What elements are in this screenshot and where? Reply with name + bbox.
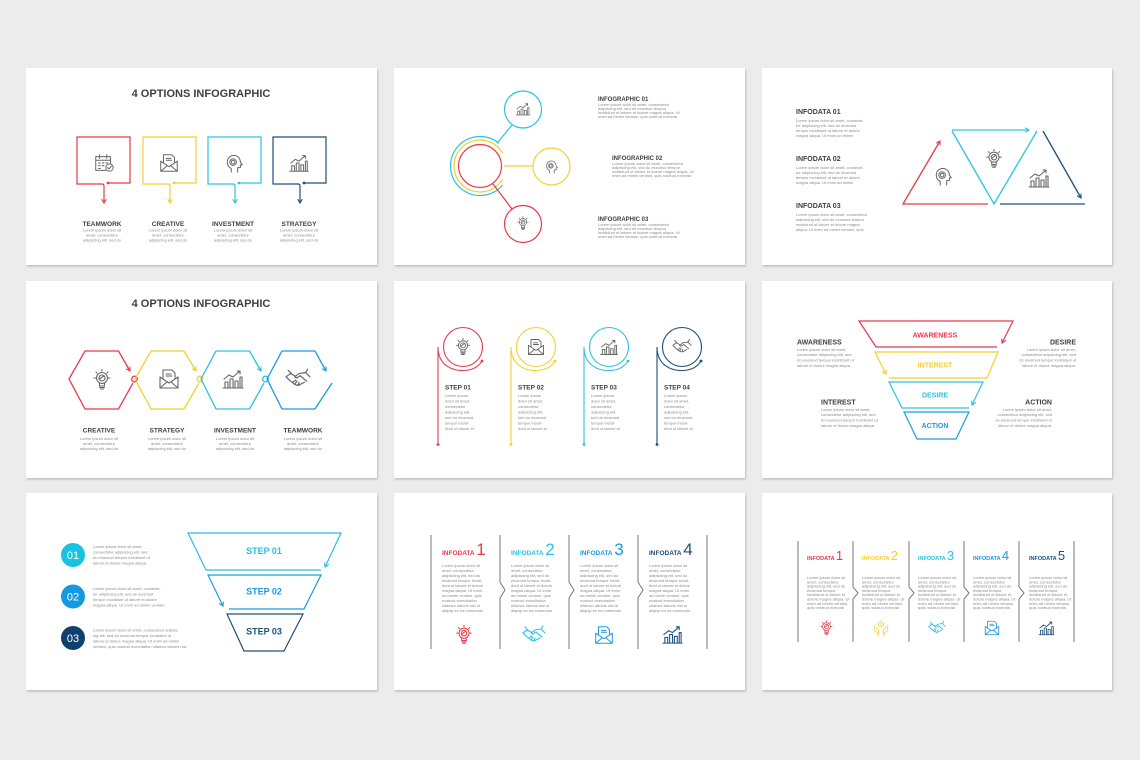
column 1: nostrud exercitation <box>442 598 477 603</box>
text: infodata 03: incididunt ut labore et dolore magna <box>796 222 860 227</box>
triangle red <box>903 141 988 204</box>
text: infographic 01: enim ad minim veniam, quis nostrud exercita <box>598 114 678 119</box>
step 04: dolor sit amet, <box>664 398 689 404</box>
labels: Lorem ipsum dolor sit <box>284 436 323 441</box>
column 3: dunt ut labore et dolore <box>580 583 622 588</box>
text: action: Lorem ipsum dolor sit amet, <box>1003 407 1052 412</box>
option: strategy <box>273 137 326 242</box>
text: desire: do eiusmod tempor incididunt ut <box>1019 358 1077 362</box>
node 3 bulb <box>504 206 542 242</box>
column 4: quis nostrud exercita <box>973 605 1011 610</box>
panel: slide 9 infodata 1-5 columns <box>762 493 1112 690</box>
column dividers <box>798 541 1074 642</box>
option: teamwork: Lorem ipsum dolor sit <box>83 228 122 232</box>
option: teamwork: amet, consectetur <box>86 232 119 238</box>
column 5: Lorem ipsum dolor sit <box>1029 575 1068 580</box>
step 01: Lorem ipsum <box>445 393 469 398</box>
funnel: desire: DESIRE <box>922 392 948 400</box>
column 4: adipiscing elit, sed do <box>973 584 1012 589</box>
title: 4 OPTIONS INFOGRAPHIC <box>132 88 270 100</box>
funnel: interest <box>875 352 998 378</box>
text: infodata 01: tempor incididunt ut labore et dolore <box>796 128 861 133</box>
option: creative: CREATIVE <box>152 221 185 228</box>
text: infographic 03 <box>598 217 680 239</box>
text: action: do eiusmod tempor incididunt ut <box>995 418 1053 422</box>
text: infographic 01 <box>598 97 680 119</box>
text: desire <box>1019 340 1077 368</box>
funnel step 01: STEP 01 <box>246 546 282 556</box>
column 1: Lorem ipsum dolor sit <box>442 563 481 568</box>
column 1: amet, consectetur <box>807 579 839 584</box>
column 3: incididunt ut labore et <box>918 592 957 597</box>
column 1: dolore magna aliqua. Ut <box>807 596 850 602</box>
node 2 head <box>533 148 570 185</box>
option: investment: INVESTMENT <box>212 221 254 228</box>
step 03: Lorem ipsum <box>591 393 615 398</box>
labels: CREATIVE <box>83 428 116 434</box>
column 1: Lorem ipsum dolor sit <box>807 575 846 580</box>
panel: slide 1 four options squares <box>26 68 377 265</box>
column 1: ullamco laboris nisi ut <box>442 603 481 608</box>
column 1: ad minim veniam, quis <box>442 593 482 598</box>
hexagon: creative <box>69 351 137 409</box>
text: infodata 01 <box>796 109 864 138</box>
column 2: magna aliqua. Ut enim <box>511 588 552 593</box>
title: 4 OPTIONS INFOGRAPHIC <box>132 298 270 310</box>
step 03: tempor incidi- <box>591 420 616 426</box>
step 03: dunt ut labore et <box>591 426 621 431</box>
column 2: INFODATA 2 <box>511 540 555 559</box>
labels: amet, consectetur <box>287 441 320 446</box>
column 1: adipiscing elit, sed do <box>807 584 846 589</box>
funnel: action <box>904 412 969 439</box>
step 02: sed do eiusmod <box>518 415 546 420</box>
step 04: Lorem ipsum <box>664 393 688 398</box>
step 01: dolor sit amet, <box>445 398 470 404</box>
step 02: Lorem ipsum <box>518 393 542 398</box>
badge 01: do eiusmod tempor incididunt ut <box>93 555 151 560</box>
text: interest: do eiusmod tempor incididunt ut <box>821 418 879 422</box>
step 02: STEP 02 <box>518 384 544 392</box>
column 4: dolore magna aliqua. Ut <box>973 596 1016 602</box>
text: desire: consectetur adipiscing elit, sed <box>1022 352 1076 357</box>
funnel: desire <box>889 382 983 408</box>
column 2: quis nostrud exercita <box>862 605 900 610</box>
step 04: tempor incidi- <box>664 420 689 426</box>
text: infographic 01: adipiscing elit, sed do eiusmod tempor <box>598 106 667 111</box>
column 1: quis nostrud exercita <box>807 605 845 610</box>
badge 01: labore et dolore magna aliqua. <box>93 560 147 566</box>
text: infographic 03: Lorem ipsum dolor sit amet, consectetur <box>598 222 670 227</box>
option: investment: amet, consectetur <box>217 232 250 238</box>
triangle dark blue <box>1000 131 1085 204</box>
column 4: magna aliqua. Ut enim <box>649 588 690 593</box>
column 4: amet, consectetur <box>973 579 1005 584</box>
step 03: sed do eiusmod <box>591 415 619 420</box>
step 02 <box>510 328 556 446</box>
step 04: consectetur <box>664 404 685 409</box>
panel: slide 7 numbered steps funnel <box>26 493 377 690</box>
labels: adipiscing elit, sed do <box>284 446 323 451</box>
text: infographic 02: Lorem ipsum dolor sit amet, consectetur <box>612 161 684 166</box>
column 4: adipiscing elit, sed do <box>649 573 688 578</box>
column 1: INFODATA 1 <box>442 540 486 559</box>
step 01: adipiscing elit, <box>445 410 470 414</box>
step 04: adipiscing elit, <box>664 410 689 414</box>
column 2: adipiscing elit, sed do <box>862 584 901 589</box>
column 4: Lorem ipsum dolor sit <box>649 563 688 568</box>
column 3: enim ad minim veniam, <box>918 601 959 606</box>
text: infodata 01: magna aliqua. Ut enim ad minim <box>796 133 854 138</box>
labels: Lorem ipsum dolor sit <box>148 436 187 441</box>
column 3: ullamco laboris nisi ut <box>580 603 619 608</box>
text: awareness: consectetur adipiscing elit, sed <box>797 352 851 357</box>
hexagon: strategy <box>135 351 203 409</box>
text: infographic 02: adipiscing elit, sed do eiusmod tempor <box>612 165 681 170</box>
step 03 <box>583 328 629 446</box>
step 03: STEP 03 <box>591 384 617 392</box>
column dividers <box>431 535 707 649</box>
text: awareness <box>797 340 855 368</box>
step 04: dunt ut labore et <box>664 426 694 431</box>
column 2: incididunt ut labore et <box>862 592 901 597</box>
column 2: amet, consectetur <box>511 568 543 573</box>
labels: amet, consectetur <box>219 441 252 446</box>
column 4 <box>973 548 1016 635</box>
text: infographic 03: incididunt ut labore et dolore magna aliqua. Ut <box>598 230 680 235</box>
column 3: Lorem ipsum dolor sit <box>918 575 957 580</box>
labels <box>80 428 323 451</box>
option: strategy: STRATEGY <box>282 221 317 228</box>
column 5: amet, consectetur <box>1029 579 1061 584</box>
badge 02: Lorem ipsum dolor sit amet, consecte- <box>93 586 161 591</box>
step 03: consectetur <box>591 404 612 409</box>
step 02: tempor incidi- <box>518 420 543 426</box>
text: infodata 01: INFODATA 01 <box>796 109 841 116</box>
column 4: dunt ut labore et dolore <box>649 583 691 588</box>
text: interest: Lorem ipsum dolor sit amet, <box>821 407 870 412</box>
column 1: enim ad minim veniam, <box>807 601 848 606</box>
column 4: amet, consectetur <box>649 568 681 573</box>
step 02: dunt ut labore et <box>518 426 548 431</box>
hub rings <box>451 125 533 209</box>
text: infographic 02: enim ad minim veniam, quis nostrud exercita <box>612 173 692 178</box>
badge 02: magna aliqua. Ut enim ad minim veniam, <box>93 602 165 608</box>
step 02: adipiscing elit, <box>518 410 543 414</box>
column 4: eiusmod tempor <box>973 588 1002 593</box>
panel: slide 8 infodata 1-4 columns <box>394 493 745 690</box>
column 3: aliquip ex ea commodo <box>580 608 622 613</box>
option: creative: adipiscing elit, sed do <box>149 238 188 242</box>
labels: adipiscing elit, sed do <box>80 446 119 451</box>
badge 03: Lorem ipsum dolor sit amet, consectetur adipisc <box>93 628 178 632</box>
text: infographic 03: enim ad minim veniam, quis nostrud exercita <box>598 234 678 239</box>
text: infodata 03: Lorem ipsum dolor sit amet, consectetur <box>796 212 868 217</box>
column 4: enim ad minim veniam, <box>973 601 1014 606</box>
badge 01: Lorem ipsum dolor sit amet, <box>93 544 142 549</box>
column 3: magna aliqua. Ut enim <box>580 588 621 593</box>
step 01: consectetur <box>445 404 466 409</box>
step 01: dunt ut labore et <box>445 426 475 431</box>
column 4: ad minim veniam, quis <box>649 593 689 598</box>
panel: slide 4 hexagons <box>26 281 377 478</box>
column 3: Lorem ipsum dolor sit <box>580 563 619 568</box>
column 3: amet, consectetur <box>918 579 950 584</box>
step 01 <box>437 328 483 446</box>
text: infodata 02 <box>796 156 864 185</box>
labels: amet, consectetur <box>151 441 184 446</box>
badge 02 <box>61 584 165 608</box>
text: infographic 03: INFOGRAPHIC 03 <box>598 217 649 223</box>
text: infographic 03: adipiscing elit, sed do eiusmod tempor <box>598 226 667 231</box>
funnel: action: ACTION <box>922 423 948 430</box>
column 3 <box>580 540 624 643</box>
text: infodata 02: magna aliqua. Ut enim ad minim <box>796 180 854 185</box>
option: strategy: adipiscing elit, sed do <box>280 238 319 242</box>
step 01: sed do eiusmod <box>445 415 473 420</box>
labels: adipiscing elit, sed do <box>216 446 255 451</box>
badge 03: veniam, quis nostrud exercitation ullamco laboris nisi <box>93 644 186 649</box>
labels: Lorem ipsum dolor sit <box>216 436 255 441</box>
text: awareness: labore et dolore magna aliqua. <box>797 363 851 368</box>
panel: slide 2 circles hub <box>394 68 745 265</box>
column 2: nostrud exercitation <box>511 598 546 603</box>
text: action: consectetur adipiscing elit, sed <box>998 412 1052 417</box>
text: action: ACTION <box>1025 400 1052 406</box>
text: interest: consectetur adipiscing elit, sed <box>821 412 875 417</box>
column 3 <box>918 548 961 632</box>
option: investment <box>208 137 261 242</box>
text: action <box>995 400 1053 428</box>
column 5: adipiscing elit, sed do <box>1029 584 1068 589</box>
column 3: INFODATA 3 <box>580 540 624 559</box>
option: investment: adipiscing elit, sed do <box>214 238 253 242</box>
column 2: enim ad minim veniam, <box>862 601 903 606</box>
text: infographic 01: Lorem ipsum dolor sit amet, consectetur <box>598 102 670 107</box>
triangle cyan <box>952 130 1037 204</box>
column 3: eiusmod tempor incidi- <box>580 578 621 583</box>
badge 02: 02 <box>67 592 79 604</box>
funnel step 01 <box>188 533 341 570</box>
badge 03: labore et dolore magna aliqua. Ut enim ad minim <box>93 638 180 644</box>
labels: adipiscing elit, sed do <box>148 446 187 451</box>
column 2: Lorem ipsum dolor sit <box>862 575 901 580</box>
option: teamwork: TEAMWORK <box>82 221 122 228</box>
column 3: adipiscing elit, sed do <box>580 573 619 578</box>
column 2 <box>511 540 555 641</box>
badge 01: consectetur adipiscing elit, sed <box>93 550 147 554</box>
column 2: eiusmod tempor incidi- <box>511 578 552 583</box>
text: infodata 01: Lorem ipsum dolor sit amet, consecte- <box>796 118 864 123</box>
text: infographic 01: INFOGRAPHIC 01 <box>598 97 649 103</box>
column 5 <box>1029 548 1072 635</box>
option: creative: amet, consectetur <box>152 232 185 238</box>
node 1 chart <box>504 91 542 128</box>
column 1: aliquip ex ea commodo <box>442 608 484 613</box>
column 3: adipiscing elit, sed do <box>918 584 957 589</box>
labels: Lorem ipsum dolor sit <box>80 436 119 441</box>
step 03: dolor sit amet, <box>591 398 616 404</box>
option: teamwork <box>77 137 130 242</box>
text: awareness: Lorem ipsum dolor sit amet, <box>797 347 846 352</box>
funnel: awareness <box>859 321 1013 347</box>
labels: STRATEGY <box>150 428 185 434</box>
column 2: dunt ut labore et dolore <box>511 583 553 588</box>
column 2: aliquip ex ea commodo <box>511 608 553 613</box>
column 5: enim ad minim veniam, <box>1029 601 1070 606</box>
badge 02: tempor incididunt ut labore et dolore <box>93 597 158 602</box>
panel: slide 3 triangles <box>762 68 1112 265</box>
column 4: INFODATA 4 <box>649 540 693 559</box>
text: infographic 02: INFOGRAPHIC 02 <box>612 156 663 162</box>
column 1: magna aliqua. Ut enim <box>442 588 483 593</box>
column 5: incididunt ut labore et <box>1029 592 1068 597</box>
column 2 <box>862 548 905 636</box>
column 3: dolore magna aliqua. Ut <box>918 596 961 602</box>
funnel step 02: STEP 02 <box>246 586 282 596</box>
badge 03: 03 <box>67 633 79 645</box>
option: creative <box>143 137 196 242</box>
option: investment: Lorem ipsum dolor sit <box>214 228 253 232</box>
column 1: eiusmod tempor incidi- <box>442 578 483 583</box>
labels: INVESTMENT <box>214 428 256 434</box>
option: teamwork: adipiscing elit, sed do <box>83 238 122 242</box>
step 03: adipiscing elit, <box>591 410 616 414</box>
text: infodata 03 <box>796 203 868 232</box>
column 4: nostrud exercitation <box>649 598 684 603</box>
column 3: amet, consectetur <box>580 568 612 573</box>
text: interest: INTEREST <box>821 400 856 406</box>
step 04 <box>656 328 702 446</box>
badge 03: ing elit, sed do eiusmod tempor incididunt ut <box>93 633 172 638</box>
text: infodata 02: tempor incididunt ut labore et dolore <box>796 175 861 180</box>
column 4 <box>649 540 693 643</box>
panel: slide 5 steps with circles <box>394 281 745 478</box>
column 5: INFODATA 5 <box>1029 548 1065 563</box>
column 4: aliquip ex ea commodo <box>649 608 691 613</box>
text: infodata 02: Lorem ipsum dolor sit amet, consecte- <box>796 165 864 170</box>
column 3: INFODATA 3 <box>918 548 954 563</box>
funnel: awareness: AWARENESS <box>913 332 958 340</box>
hexagon: teamwork <box>267 351 332 409</box>
column 1: dunt ut labore et dolore <box>442 583 484 588</box>
column 2: adipiscing elit, sed do <box>511 573 550 578</box>
column 2: eiusmod tempor <box>862 588 891 593</box>
text: interest: labore et dolore magna aliqua. <box>821 423 875 428</box>
step 02: dolor sit amet, <box>518 398 543 404</box>
funnel step 02 <box>208 575 321 609</box>
column 1: adipiscing elit, sed do <box>442 573 481 578</box>
step 02: consectetur <box>518 404 539 409</box>
column 5: quis nostrud exercita <box>1029 605 1067 610</box>
step 01: STEP 01 <box>445 384 471 392</box>
text: infographic 02: incididunt ut labore et dolore magna aliqua. Ut <box>612 169 694 174</box>
option: strategy: Lorem ipsum dolor sit <box>280 228 319 232</box>
column 1: eiusmod tempor <box>807 588 836 593</box>
column 2: Lorem ipsum dolor sit <box>511 563 550 568</box>
text: infodata 03: INFODATA 03 <box>796 203 841 210</box>
text: infodata 03: adipiscing elit, sed do eiusmod tempor <box>796 217 865 222</box>
text: infodata 02: tur adipiscing elit, sed do eiusmod <box>796 170 856 175</box>
column 2: dolore magna aliqua. Ut <box>862 596 905 602</box>
column 1: amet, consectetur <box>442 568 474 573</box>
text: awareness: do eiusmod tempor incididunt ut <box>797 358 855 362</box>
column 3: eiusmod tempor <box>918 588 947 593</box>
panel: slide 6 AIDA funnel <box>762 281 1112 478</box>
text: infographic 01: incididunt ut labore et dolore magna aliqua. Ut <box>598 110 680 115</box>
text: action: labore et dolore magna aliqua. <box>998 423 1052 428</box>
column 1 <box>807 548 850 634</box>
column 4: ullamco laboris nisi ut <box>649 603 688 608</box>
hexagon: investment <box>201 351 268 409</box>
badge 01 <box>61 543 151 567</box>
step 04: STEP 04 <box>664 384 690 392</box>
column 2: amet, consectetur <box>862 579 894 584</box>
text: desire: labore et dolore magna aliqua. <box>1022 363 1076 368</box>
column 2: ullamco laboris nisi ut <box>511 603 550 608</box>
column 1: incididunt ut labore et <box>807 592 846 597</box>
column 1 <box>442 540 486 643</box>
labels: TEAMWORK <box>284 428 323 434</box>
text: awareness: AWARENESS <box>797 340 842 346</box>
column 1: INFODATA 1 <box>807 548 843 563</box>
text: infographic 02 <box>612 156 694 178</box>
badge 01: 01 <box>67 550 79 562</box>
option: strategy: amet, consectetur <box>283 232 316 238</box>
text: desire: DESIRE <box>1050 340 1076 346</box>
column 5: dolore magna aliqua. Ut <box>1029 596 1072 602</box>
column 4: incididunt ut labore et <box>973 592 1012 597</box>
column 4: eiusmod tempor incidi- <box>649 578 690 583</box>
funnel: interest: INTEREST <box>918 362 953 370</box>
step 04: sed do eiusmod <box>664 415 692 420</box>
column 2: ad minim veniam, quis <box>511 593 551 598</box>
funnel step 03: STEP 03 <box>246 626 282 636</box>
column 4: INFODATA 4 <box>973 548 1009 563</box>
funnel step 03 <box>227 614 303 651</box>
option: creative: Lorem ipsum dolor sit <box>149 228 188 232</box>
text: infodata 02: INFODATA 02 <box>796 156 841 163</box>
column 5: eiusmod tempor <box>1029 588 1058 593</box>
labels: amet, consectetur <box>83 441 116 446</box>
text: infodata 01: tur adipiscing elit, sed do eiusmod <box>796 123 856 128</box>
text: infodata 03: aliqua. Ut enim ad minim veniam, quis <box>796 227 864 232</box>
badge 02: tur adipiscing elit, sed do eiusmod <box>93 592 153 596</box>
column 3: quis nostrud exercita <box>918 605 956 610</box>
step 01: tempor incidi- <box>445 420 470 426</box>
column 3: nostrud exercitation <box>580 598 615 603</box>
text: desire: Lorem ipsum dolor sit amet, <box>1027 347 1076 352</box>
column 4: Lorem ipsum dolor sit <box>973 575 1012 580</box>
column 3: ad minim veniam, quis <box>580 593 620 598</box>
badge 03 <box>61 626 186 650</box>
column 2: INFODATA 2 <box>862 548 898 563</box>
text: interest <box>821 400 879 428</box>
